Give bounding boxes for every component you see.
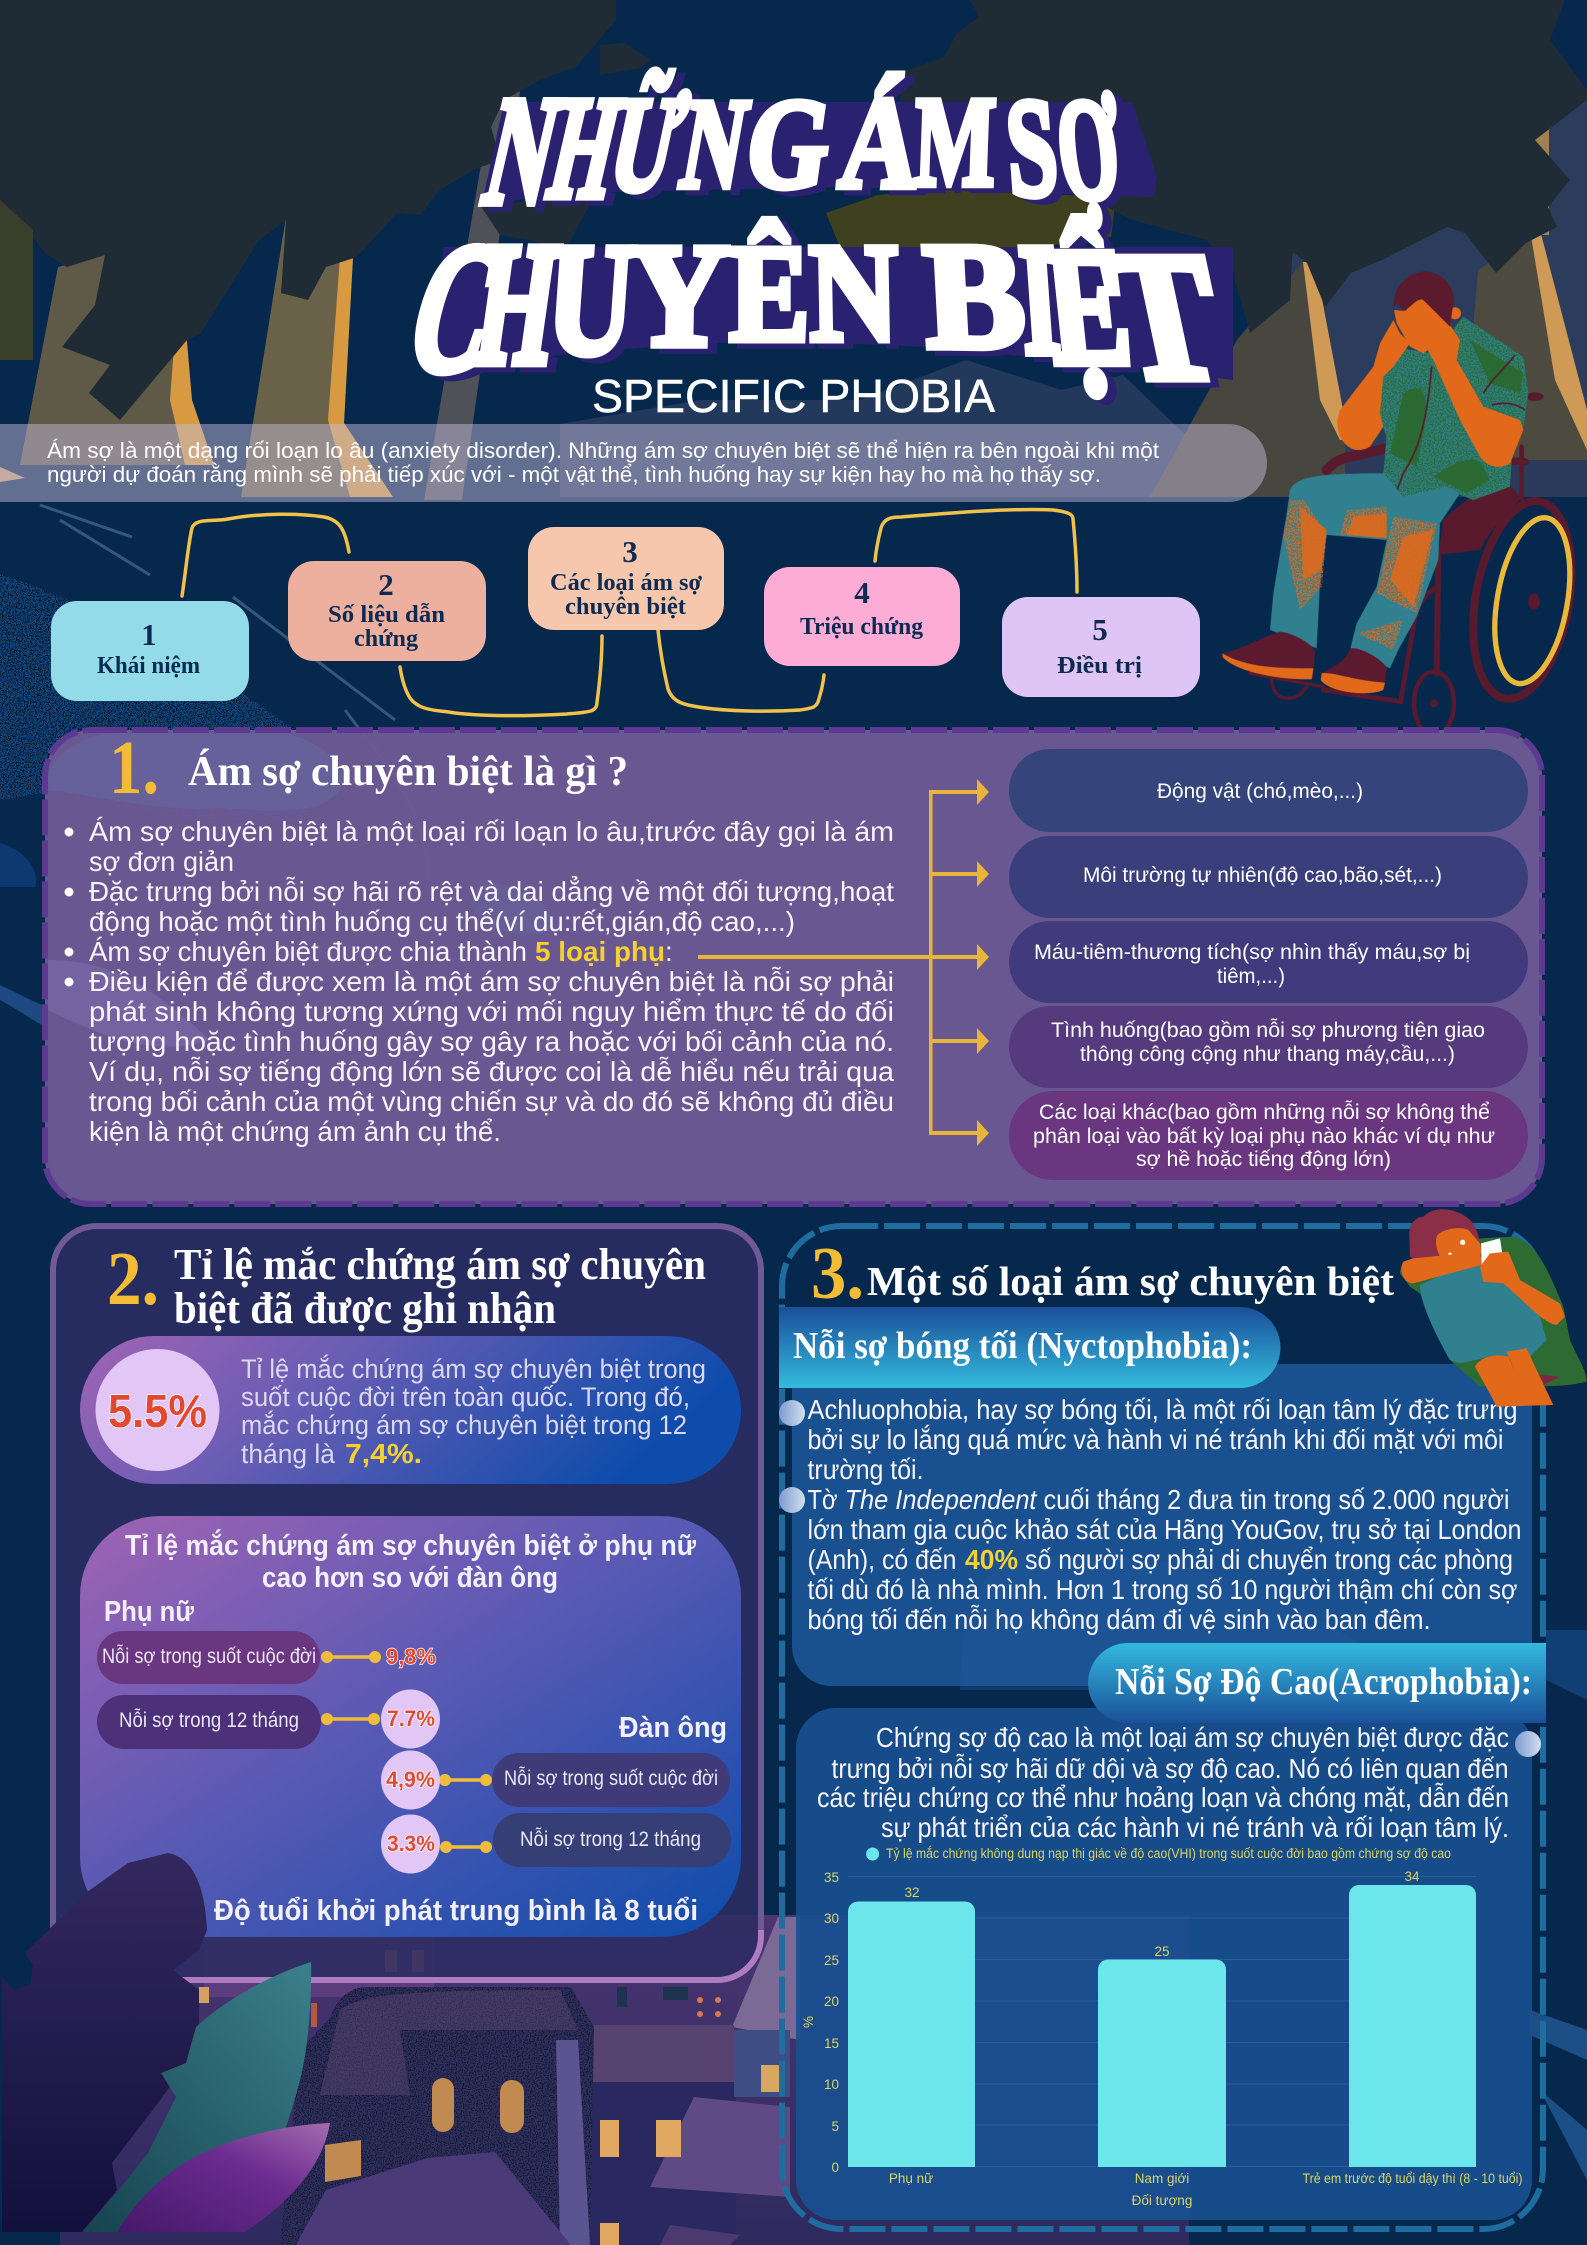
women lifetime row: 9,8% [386,1644,436,1669]
acrophobia text and chart panel: Chứng sợ độ cao là một loại ám sợ chuyên biệt được đặc [876,1722,1509,1753]
men lifetime row [381,1750,730,1810]
bullet list: Đặc trưng bởi nỗi sợ hãi rõ rệt và dai dẳng về một đối tượng,hoạt [89,875,894,907]
y axis title: % [801,2016,816,2028]
nav card 4: 4 [854,575,870,610]
y axis labels: 10 [824,2077,839,2092]
subtitle: SPECIFIC PHOBIA [592,370,995,422]
title: Ợ [1050,70,1128,230]
nav card 4: Triệu chứng [800,614,923,640]
bullet list: : [665,936,673,967]
heading: section 1: 1. [109,726,159,810]
title: T [1091,216,1238,418]
y axis labels: 15 [824,2036,839,2051]
nyctophobia text panel: The Independent [844,1484,1038,1515]
stat card: 5.5% [80,1336,741,1484]
subtype pill 1: Động vật (chó,mèo,...) [1157,779,1363,803]
bar: Phụ nữ 32: Phụ nữ [889,2171,933,2186]
men lifetime row: Nỗi sợ trong suốt cuộc đời [504,1767,718,1790]
nav card 1: Khái niệm [97,653,200,679]
y axis labels: 30 [824,1911,839,1926]
subtype pill 4 [1009,1006,1528,1088]
gender comparison card: Phụ nữ [104,1596,194,1628]
women 12 months row: 7.7% [387,1706,435,1731]
bar: Phụ nữ 32: 32 [904,1885,920,1900]
nyctophobia text panel: 40% [965,1544,1018,1575]
title: Ữ [598,68,697,220]
stat card: 5.5%: Tỉ lệ mắc chứng ám sợ chuyên biệt trong [241,1353,706,1384]
arrows to subtypes [698,779,989,1146]
y axis labels [824,1870,839,2175]
nav card 1: 1 [141,617,157,652]
bar: Nam giới 25: 25 [1154,1944,1170,1959]
bullet list [64,816,894,1147]
title: Ệ [1038,213,1139,400]
title: Y [627,214,731,378]
bullet list: kiện là một chứng ám ảnh cụ thể. [89,1116,501,1147]
title: C [390,205,523,410]
nav card 5: Điều trị [1057,653,1142,679]
intro ribbon: Ám sợ là một dạng rối loạn lo âu (anxiety disorder). Những ám sợ chuyên biệt sẽ thể hiện ra bên ngoài khi một [47,438,1160,463]
bullet list: tượng hoặc tình huống gây sợ gây ra hoặc với bối cảnh của nó. [89,1026,894,1057]
gender comparison card [80,1516,741,1937]
men lifetime row: 4,9% [386,1767,435,1792]
title: U [542,211,641,388]
title [390,64,1238,418]
bar: Trẻ em 34: Trẻ em trước độ tuổi dậy thì (8 - 10 tuổi) [1302,2171,1522,2186]
nav card 5: 5 [1092,612,1108,647]
nyctophobia text panel: (Anh), có đến [808,1544,956,1575]
title: H [466,206,569,401]
acrophobia text and chart panel: trưng bởi nỗi sợ hãi dữ dội và sợ độ cao. Nó có liên quan đến [832,1753,1508,1784]
heading: section 3: Một số loại ám sợ chuyên biệt [867,1258,1394,1304]
stat card: 5.5%: tháng là [241,1439,336,1469]
title: N [672,72,757,215]
title: N [471,64,574,237]
subtype pill 4: Tình huống(bao gồm nỗi sợ phương tiện giao [1051,1017,1485,1042]
subtype pill 5: phân loại vào bất kỳ loại phụ nào khác ví dụ như [1033,1124,1495,1148]
bar: Nam giới 25 [1098,1944,1226,2186]
nav card 3: 3 [622,534,638,569]
nav card 3: Các loại ám sợ [550,570,703,596]
chart legend: Tỷ lệ mắc chứng không dung nạp thị giác về độ cao(VHI) trong suốt cuộc đời bao gồm chứng sợ độ cao [886,1846,1451,1861]
subtype pill 4: thông công cộng như thang máy,cầu,...) [1080,1042,1455,1066]
title: I [1014,211,1065,388]
title: S [1001,69,1062,226]
nav card 3: chuyên biệt [565,594,686,620]
heading: section 2 [107,1237,706,1333]
heading: section 3: 3. [811,1233,864,1315]
nyctophobia text panel: cuối tháng 2 đưa tin trong số 2.000 người [1044,1484,1510,1515]
panel 1: definition [45,726,1542,1204]
nav card 2: 2 [378,567,394,602]
bullet list: phát sinh không tương xứng với mối nguy hiểm thực tế do đối [89,996,894,1027]
nav card 2: Số liệu dẫn [328,602,445,628]
nyctophobia banner: Nỗi sợ bóng tối (Nyctophobia): [793,1325,1252,1367]
gender comparison card: Đàn ông [619,1712,727,1744]
acrophobia banner: Nỗi Sợ Độ Cao(Acrophobia): [1115,1661,1532,1703]
bullet list: trong bối cảnh của một vùng chiến sự và do đó sẽ không đủ điều [89,1086,894,1117]
stat card: 5.5%: mắc chứng ám sợ chuyên biệt trong 12 [241,1409,687,1440]
bullet list: Ám sợ chuyên biệt là một loại rối loạn lo âu,trước đây gọi là ám [89,816,894,847]
title: Á [834,70,925,216]
acrophobia text and chart panel: các triệu chứng cơ thể như hoảng loạn và chóng mặt, dẫn đến [817,1782,1509,1813]
heading: section 1: Ám sợ chuyên biệt là gì ? [188,748,628,795]
title: G [738,73,840,215]
acrophobia text and chart panel [796,1708,1541,2220]
gender comparison card: Tỉ lệ mắc chứng ám sợ chuyên biệt ở phụ nữ [125,1528,696,1562]
gender comparison card: Độ tuổi khởi phát trung bình là 8 tuổi [214,1895,698,1927]
y axis labels: 5 [831,2119,839,2134]
subtype pill 2 [1009,836,1528,918]
nyctophobia banner [779,1307,1280,1388]
subtype pill 3: tiêm,...) [1217,964,1285,988]
panel 3: phobia types [779,1226,1546,2229]
heading: section 2: Tỉ lệ mắc chứng ám sợ chuyên [174,1240,706,1289]
nav card 2 [288,561,486,661]
subtype pill 3 [1009,921,1528,1003]
bullet list: Ám sợ chuyên biệt được chia thành [89,936,527,967]
bullet list: động hoặc một tình huống cụ thể(ví dụ:rết,gián,độ cao,...) [89,906,795,937]
y axis labels: 35 [824,1870,839,1885]
acrophobia text and chart panel: sự phát triển của các hành vi né tránh và rối loạn tâm lý. [881,1812,1509,1843]
nyctophobia text panel: bởi sự lo lắng quá mức và hành vi né tránh khi đối mặt với môi [808,1424,1504,1455]
women lifetime row [97,1631,436,1684]
subtype pill 5: Các loại khác(bao gồm những nỗi sợ không thể [1039,1099,1490,1124]
nav card 2: chứng [354,626,418,652]
men 12 months row: 3.3% [387,1831,435,1856]
men 12 months row [381,1813,731,1874]
stat card: 5.5%: suốt cuộc đời trên toàn quốc. Trong đó, [241,1382,690,1412]
bullet list: sợ đơn giản [89,846,234,877]
nyctophobia text panel [779,1364,1532,1690]
nav card 1 [51,601,249,701]
heading: section 2: 2. [107,1237,159,1321]
panel 2: prevalence [53,1226,761,1980]
intro ribbon [0,424,1267,502]
gender comparison card: cao hơn so với đàn ông [262,1562,558,1594]
nav card 4 [764,567,960,666]
town illustration [60,1915,1189,2245]
illustration: man in wheelchair [1222,272,1586,735]
y axis labels: 0 [831,2160,839,2175]
nav card 3 [528,527,724,630]
illustration: foreground leaves [2,1853,330,2232]
y axis labels: 20 [824,1994,839,2009]
bar: Phụ nữ 32 [848,1885,975,2186]
nyctophobia text panel: tối dù đó là nhà mình. Hơn 1 trong số 10 người thậm chí còn sợ [808,1574,1518,1605]
acrophobia banner [1088,1643,1546,1723]
nav card 5 [1002,597,1200,697]
title: H [537,66,634,229]
subtype pill 5 [1009,1091,1528,1180]
women 12 months row: Nỗi sợ trong 12 tháng [119,1709,299,1732]
heading: section 3 [811,1233,1394,1315]
nyctophobia text panel: lớn tham gia cuộc khảo sát của Hãng YouGov, trụ sở tại London [808,1514,1522,1545]
illustration: crying girl with phone [1400,1209,1587,1407]
women lifetime row: Nỗi sợ trong suốt cuộc đời [102,1645,316,1668]
bullet list: Điều kiện để được xem là một ám sợ chuyên biệt là nỗi sợ phải [89,966,894,997]
forest scene [0,0,1587,500]
subtype pill 5: sợ hề hoặc tiếng động lớn) [1136,1147,1391,1171]
title: B [920,211,1029,380]
bar: Nam giới 25: Nam giới [1135,2171,1189,2186]
nyctophobia text panel: số người sợ phải di chuyển trong các phòng [1025,1544,1513,1575]
nyctophobia text panel: Achluophobia, hay sợ bóng tối, là một rối loạn tâm lý đặc trưng [808,1394,1518,1425]
title: Ê [729,217,810,371]
textured swoosh background [0,505,1587,2180]
stat card: 5.5%: 5.5% [108,1385,207,1437]
intro ribbon: người dự đoán rằng mình sẽ phải tiếp xúc với - một vật thể, tình huống hay sự kiện hay ho mà họ thấy sợ. [47,462,1101,487]
stat card: 5.5%: 7,4%. [345,1438,422,1469]
nyctophobia text panel: trường tối. [808,1454,924,1485]
subtype pill 2: Môi trường tự nhiên(độ cao,bão,sét,...) [1083,863,1442,887]
nyctophobia text panel: Tờ [808,1484,838,1515]
heading: section 2: biệt đã được ghi nhận [174,1284,556,1333]
title backing shapes [422,102,1233,380]
subtype pill 1 [1009,749,1528,832]
title: M [912,70,998,213]
title: N [808,214,899,371]
bar: Trẻ em 34 [1302,1869,1522,2186]
y axis labels: 25 [824,1953,839,1968]
women 12 months row [97,1690,440,1749]
connector: navigation path [182,510,1077,716]
men 12 months row: Nỗi sợ trong 12 tháng [520,1828,701,1851]
nyctophobia text panel: bóng tối đến nỗi họ không dám đi vệ sinh vào ban đêm. [808,1604,1430,1635]
bullet list: Ví dụ, nỗi sợ tiếng động lớn sẽ được coi là dễ hiểu nếu trải qua [89,1056,894,1087]
heading: section 1 [109,726,628,810]
bullet list: 5 loại phụ [535,936,665,967]
bar: Trẻ em 34: 34 [1404,1869,1420,1884]
x axis title: Đối tượng [1132,2193,1192,2208]
bar chart [801,1846,1522,2208]
subtype pill 3: Máu-tiêm-thương tích(sợ nhìn thấy máu,sợ bị [1034,940,1470,964]
